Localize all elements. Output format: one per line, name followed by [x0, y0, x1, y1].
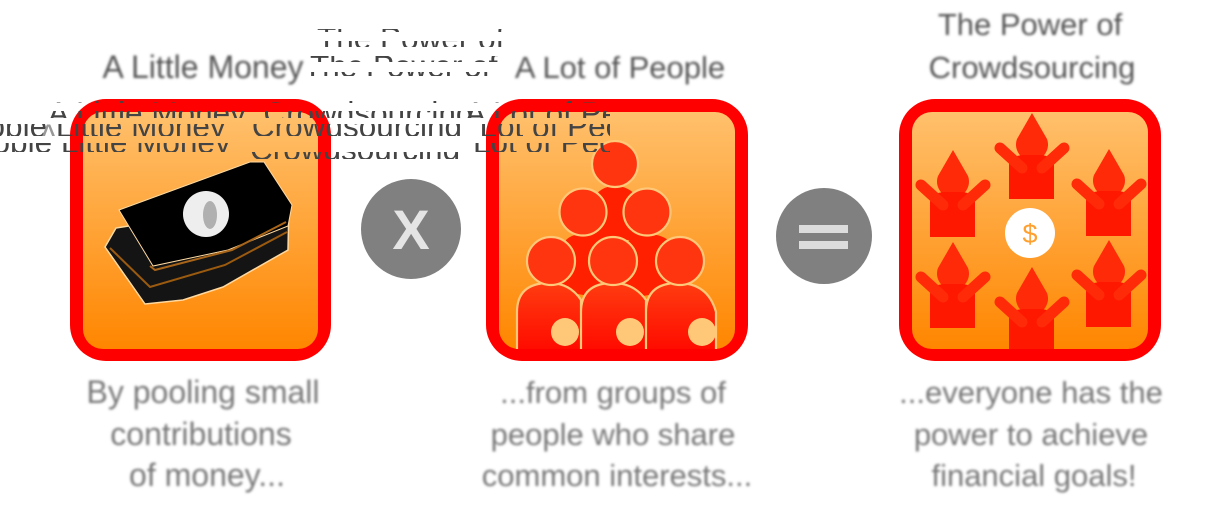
caption: from groups of people who share common interests: common interests...	[482, 458, 752, 493]
caption: everyone has the power to achieve financial goals: ...everyone has the	[899, 375, 1163, 410]
operator: equals	[776, 188, 872, 284]
icon: group of people with coins	[517, 141, 716, 349]
icon: dollar coin	[1005, 208, 1055, 258]
overlapping heading fragments: the power of: The Power of	[317, 20, 505, 56]
overlapping heading fragments: little money, crowdsourcing, a lot of people: A Lot of People	[465, 95, 679, 131]
caption: from groups of people who share common interests: people who share	[491, 417, 735, 452]
caption: from groups of people who share common interests	[482, 375, 752, 493]
caption: by pooling small contributions of money: contributions	[110, 416, 292, 452]
caption: everyone has the power to achieve financial goals: power to achieve	[914, 417, 1148, 452]
card: a lot of people	[486, 99, 748, 361]
heading: a lot of people: A Lot of People	[515, 50, 725, 85]
overlapping heading fragments: the power of	[310, 29, 502, 76]
overlapping heading fragments: little money, crowdsourcing, a lot of people: A	[38, 117, 59, 153]
caption: by pooling small contributions of money: By pooling small	[86, 374, 320, 410]
heading: a little money: A Little Money	[102, 49, 304, 85]
card: a little money	[70, 99, 331, 361]
overlapping heading fragments: the power of: The Power of	[303, 48, 491, 84]
operator: multiply	[361, 179, 461, 279]
heading: the power of crowdsourcing	[929, 7, 1135, 85]
heading: the power of crowdsourcing: The Power of	[938, 7, 1123, 42]
card: the power of crowdsourcing	[899, 99, 1161, 361]
icon: six people around a coin	[921, 113, 1141, 357]
overlapping heading fragments: little money, crowdsourcing, a lot of people: Crowdsourcing	[250, 131, 460, 167]
icon: stack of money	[105, 162, 292, 304]
overlapping heading fragments: the power of: The Power of	[310, 48, 498, 84]
caption: by pooling small contributions of money	[86, 374, 320, 493]
overlapping heading fragments: little money, crowdsourcing, a lot of people: Lot of People	[473, 124, 659, 160]
caption: by pooling small contributions of money: of money...	[129, 457, 285, 493]
overlapping heading fragments: little money, crowdsourcing, a lot of people: A Little Money Crowdsourcing	[48, 95, 473, 131]
caption: everyone has the power to achieve financial goals: financial goals!	[931, 458, 1137, 493]
caption: from groups of people who share common interests: ...from groups of	[500, 375, 726, 410]
heading: the power of crowdsourcing: Crowdsourcing	[929, 50, 1135, 85]
operator: multiply: X	[392, 198, 430, 261]
caption: everyone has the power to achieve financial goals	[899, 375, 1163, 493]
icon: dollar coin: $	[1022, 219, 1038, 249]
overlapping heading fragments: little money, crowdsourcing, a lot of people	[0, 101, 610, 159]
